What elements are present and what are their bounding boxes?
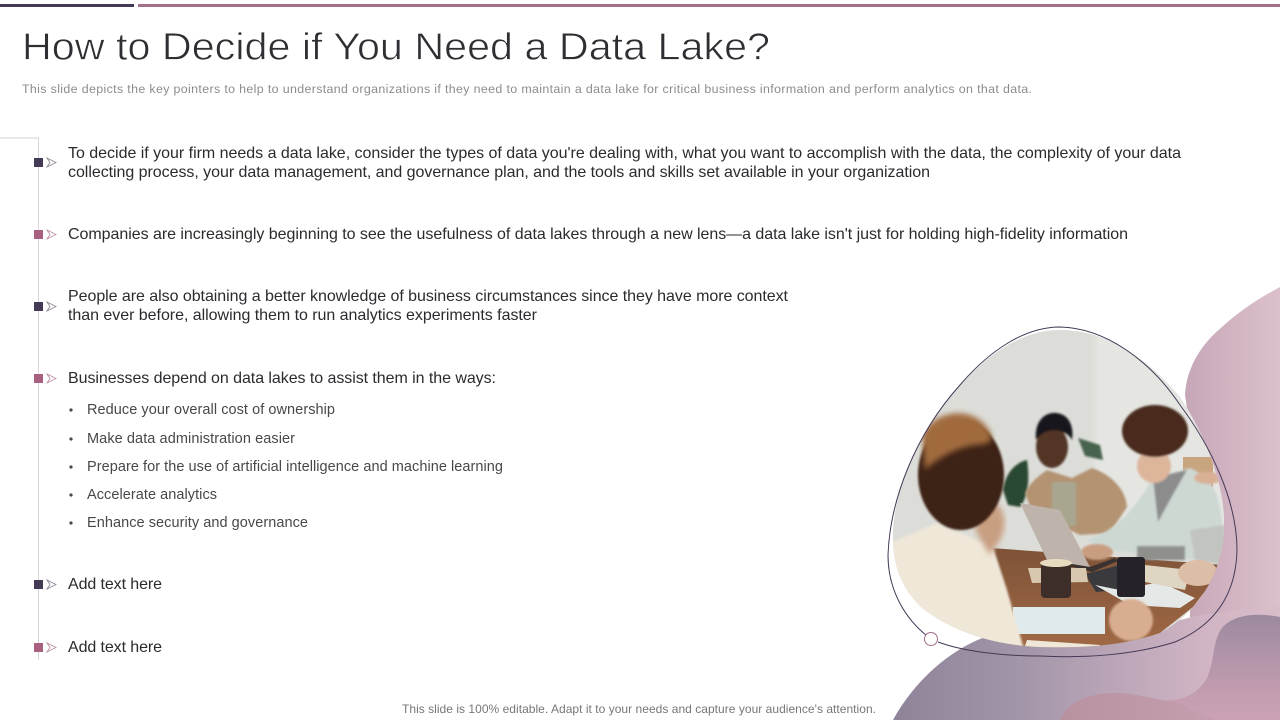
item 1: collecting process, your data management, and governance plan, and the tools and skills set available in your organization [68, 164, 930, 181]
item 5: Add text here [68, 576, 162, 593]
decorative blobs [893, 287, 1280, 720]
footer note: This slide is 100% editable. Adapt it to your needs and capture your audience's attention. [402, 702, 876, 716]
sub-bullets [69, 402, 503, 531]
timeline line [0, 138, 38, 660]
subtitle: This slide depicts the key pointers to help to understand organizations if they need to maintain a data lake for critical business information and perform analytics on that data. [22, 82, 1032, 96]
hand right [1178, 560, 1218, 586]
blob: bottom purple [893, 605, 1280, 720]
item 1 [34, 145, 1181, 181]
sub-bullets: Enhance security and governance [87, 515, 308, 531]
foreground person [893, 408, 1100, 648]
woman right [1081, 405, 1225, 565]
item 3: than ever before, allowing them to run analytics experiments faster [68, 307, 538, 324]
sub-bullets: Prepare for the use of artificial intelligence and machine learning [87, 459, 503, 475]
blob: right pink [1185, 287, 1280, 640]
document [1013, 607, 1105, 634]
table [992, 548, 1218, 648]
photo: meeting around a table [893, 330, 1224, 648]
item 1: To decide if your firm needs a data lake, consider the types of data you're dealing with, what you want to accomplish with the data, the complexity of your data [68, 145, 1181, 162]
notebook [1028, 568, 1088, 583]
sub-bullets: Make data administration easier [87, 431, 295, 447]
laptop [1020, 503, 1090, 567]
bullet list [34, 145, 1181, 656]
item 2: Companies are increasingly beginning to see the usefulness of data lakes through a new lens—a data lake isn't just for holding high-fidelity information [68, 226, 1128, 243]
man [1025, 413, 1127, 535]
item 6: Add text here [68, 639, 162, 656]
papers [1095, 582, 1195, 608]
cups [1040, 559, 1072, 598]
hand foreground [1109, 599, 1153, 641]
shelf [1183, 457, 1213, 487]
dark tablet on table [1086, 566, 1117, 592]
plants [1003, 438, 1103, 507]
item 3: People are also obtaining a better knowledge of business circumstances since they have more context [68, 288, 789, 305]
photo outline with ring [888, 327, 1237, 657]
title: How to Decide if You Need a Data Lake? [22, 26, 770, 68]
sub-bullets: Reduce your overall cost of ownership [87, 402, 335, 418]
top accent bar [0, 4, 1280, 7]
blob: bottom pink [1060, 693, 1215, 720]
item 3 [34, 288, 789, 324]
blob: dark right [1160, 615, 1280, 720]
sub-bullets: Accelerate analytics [87, 487, 217, 503]
item 4: Businesses depend on data lakes to assist them in the ways: [68, 370, 496, 387]
